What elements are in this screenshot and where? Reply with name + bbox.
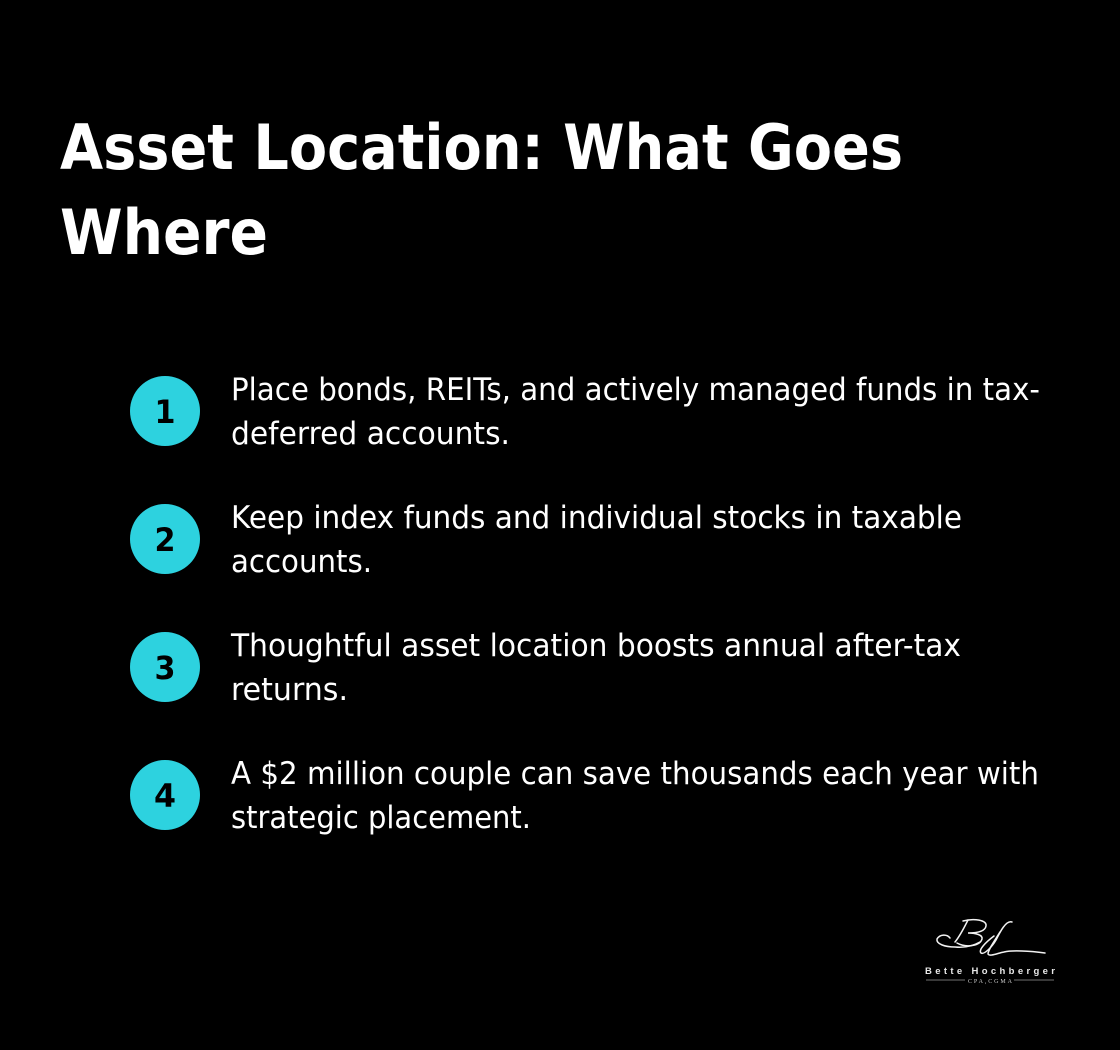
- item 2 text: accounts.: [231, 544, 372, 580]
- title: Where: [60, 196, 268, 269]
- item 3 text: [230, 628, 961, 708]
- logo name: Bette Hochberger: [925, 966, 1055, 977]
- icon: BH monogram: [937, 920, 1045, 955]
- item 3 text: Thoughtful asset location boosts annual after-tax: [230, 628, 961, 664]
- number badge 2: 2: [154, 521, 176, 559]
- number badge 3: [130, 632, 200, 702]
- number badge 1: 1: [154, 393, 176, 431]
- item 3 text: returns.: [231, 672, 348, 708]
- item 4 text: [231, 756, 1039, 836]
- list item 4: [130, 756, 1039, 836]
- item 2 text: Keep index funds and individual stocks in taxable: [231, 500, 962, 536]
- number badge 1: [130, 376, 200, 446]
- item 4 text: strategic placement.: [231, 800, 531, 836]
- item 2 text: [231, 500, 962, 580]
- number badge 2: [130, 504, 200, 574]
- number badge 3: 3: [154, 649, 176, 687]
- item 4 text: A $2 million couple can save thousands each year with: [231, 756, 1039, 792]
- item 1 text: deferred accounts.: [231, 416, 510, 452]
- list item 1: [130, 372, 1040, 452]
- item 1 text: Place bonds, REITs, and actively managed funds in tax-: [231, 372, 1040, 408]
- number badge 4: 4: [154, 777, 176, 815]
- list item 2: [130, 500, 962, 580]
- logo divider and credentials: CPA,CGMA: [968, 979, 1013, 985]
- title: Asset Location: What Goes: [60, 111, 903, 184]
- logo: Bette Hochberger signature: [925, 920, 1055, 985]
- list item 3: [130, 628, 961, 708]
- number badge 4: [130, 760, 200, 830]
- title: [60, 111, 903, 269]
- item 1 text: [231, 372, 1040, 452]
